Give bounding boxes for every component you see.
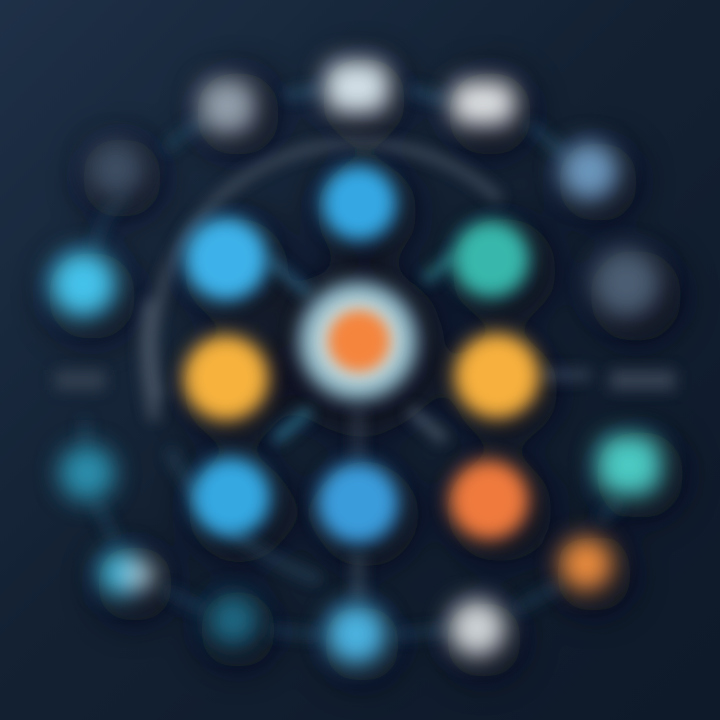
inner node: left yellow: [183, 335, 269, 421]
node shadows: [48, 58, 684, 682]
outer node: right grey: [591, 248, 661, 318]
outer node: lower left cyan: [98, 549, 155, 597]
outer node: upper right blue-grey: [559, 141, 619, 201]
outer node: bottom right white: [448, 599, 506, 657]
inner node: lower right orange: [449, 460, 529, 540]
outer node: top left grey: [198, 78, 256, 134]
inner node: lower left blue: [191, 457, 271, 537]
inner node: upper left blue: [184, 217, 268, 301]
hub core: orange: [328, 310, 390, 372]
connecting ring and lines: [55, 90, 675, 635]
outer node: top right white: [450, 80, 516, 126]
inner node: right yellow: [454, 333, 540, 419]
inner node: bottom blue: [317, 462, 399, 544]
outer node: top white: [324, 60, 390, 114]
outer node: upper left grey: [86, 139, 146, 199]
outer node: right teal: [596, 434, 662, 496]
inner node: top blue: [321, 165, 397, 241]
central hub: [298, 281, 418, 401]
outer node: bottom blue: [325, 603, 387, 665]
outer node: bottom left teal: [207, 594, 259, 646]
outer node: left lower teal: [59, 445, 115, 501]
outer node: left cyan: [49, 250, 117, 318]
inner node: upper right teal: [452, 220, 530, 298]
outer node: lower right orange: [559, 537, 613, 591]
